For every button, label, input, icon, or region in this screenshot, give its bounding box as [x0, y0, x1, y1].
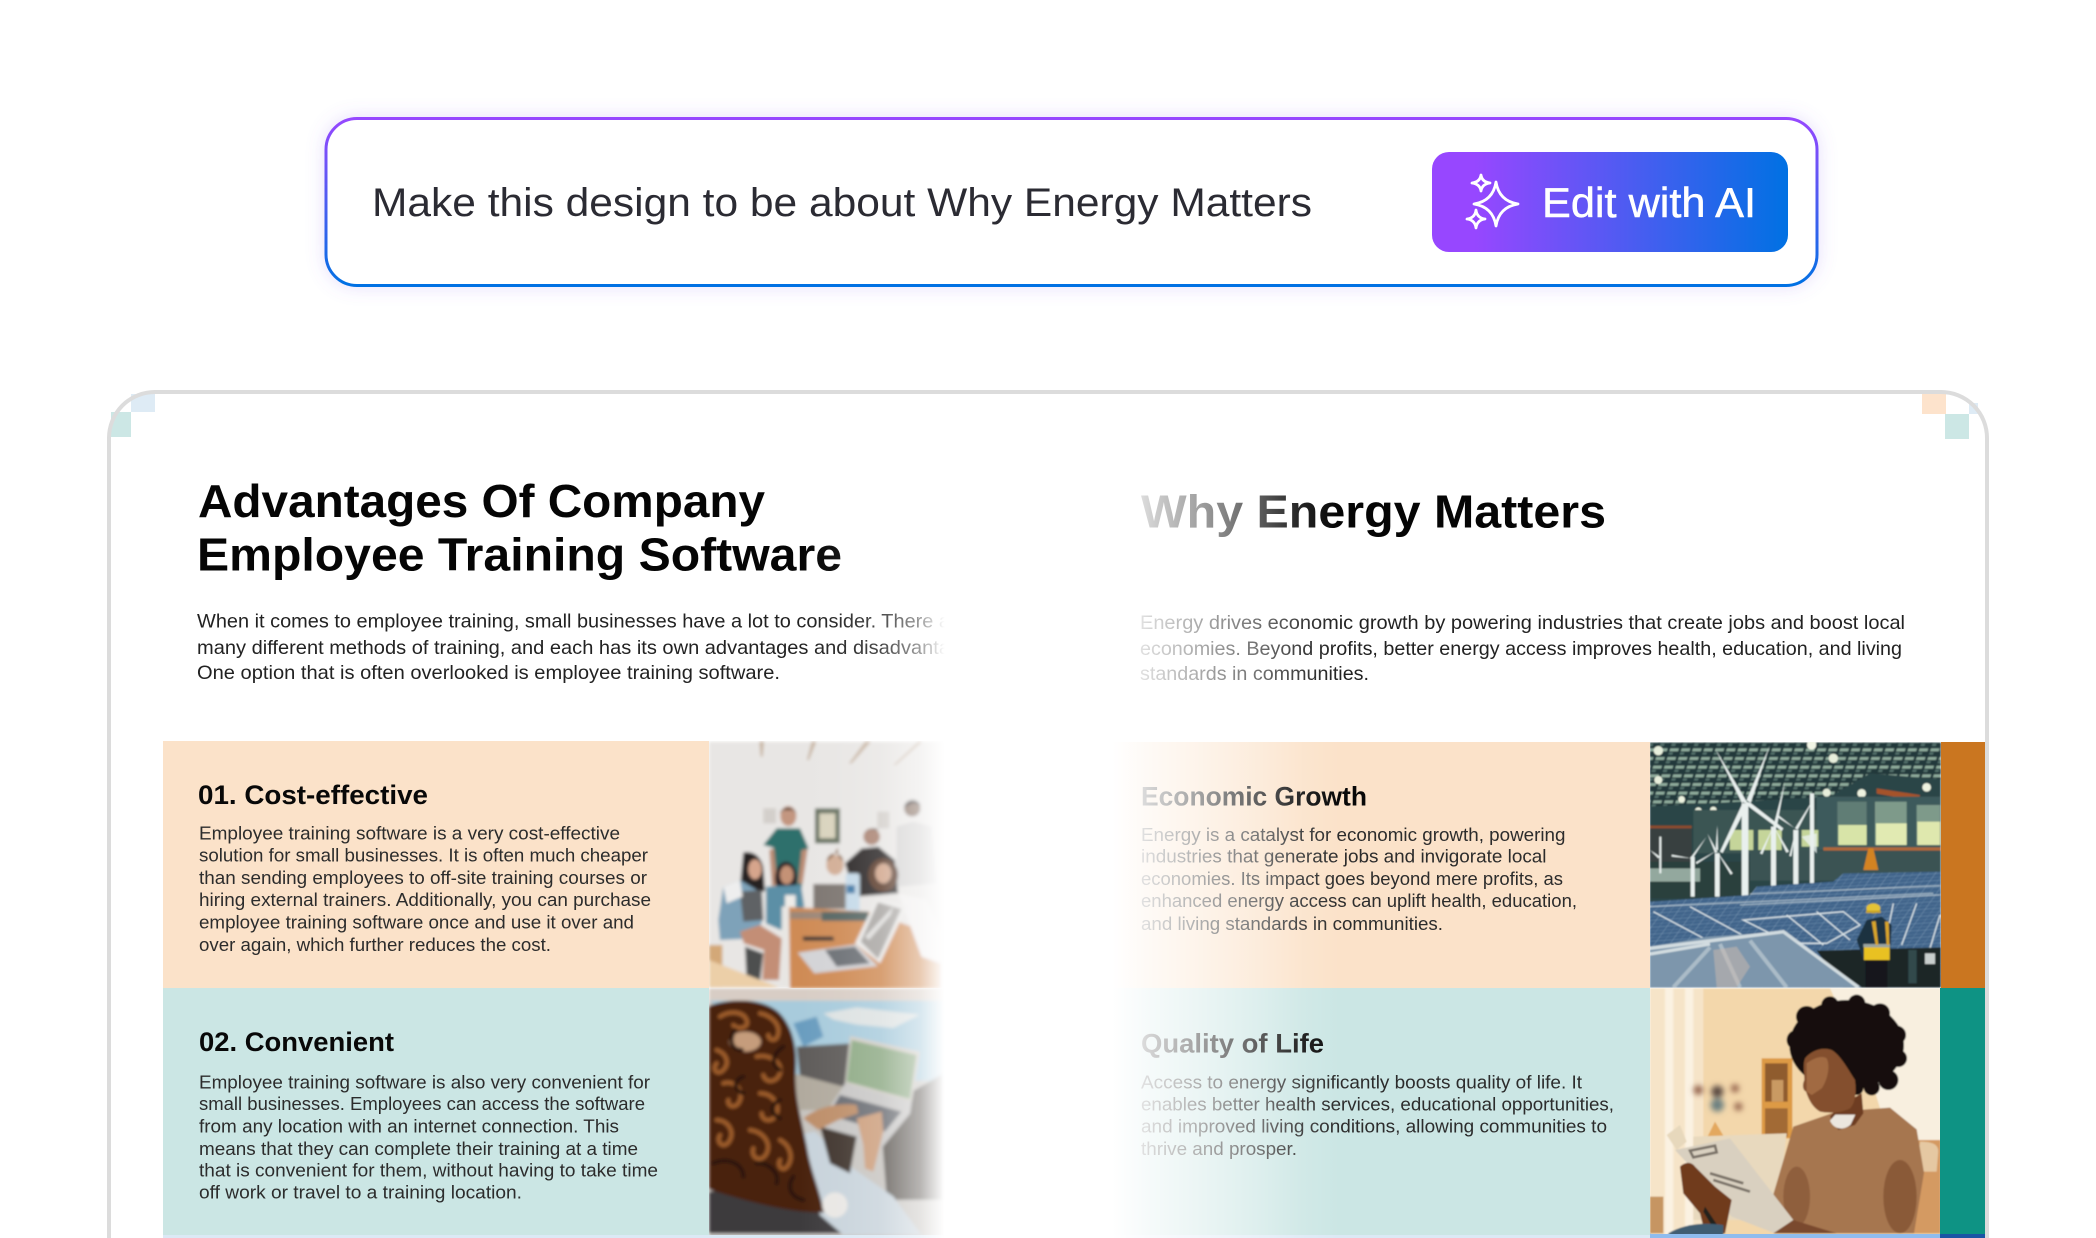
- card text: 02 convenient: means that they can complete their training at a time: [199, 1138, 638, 1159]
- card text: quality of life: [1141, 1028, 1614, 1159]
- card text: 02 convenient: small businesses. Employees can access the software: [199, 1093, 645, 1114]
- left slide title: Employee Training Software: [197, 528, 842, 580]
- card text: 02 convenient: from any location with an internet connection. This: [199, 1116, 619, 1136]
- left slide intro text: [197, 610, 950, 684]
- right slide intro text: economies. Beyond profits, better energy access improves health, education, and living: [1140, 638, 1902, 660]
- card text: 02 convenient: Employee training software is also very convenient for: [199, 1072, 650, 1092]
- prompt bar: [326, 118, 1817, 286]
- card text: 01 cost-effective: Employee training software is a very cost-effective: [199, 822, 620, 844]
- button: edit with AI: Edit with AI: [1542, 179, 1756, 226]
- right slide intro text: [1140, 612, 1905, 685]
- card text: economic growth: enhanced energy access can uplift health, education,: [1141, 890, 1577, 911]
- photo: wind turbines and solar panels in a factory: [1650, 740, 1941, 987]
- card text: quality of life: and improved living conditions, allowing communities to: [1141, 1116, 1607, 1136]
- card text: 01 cost-effective: than sending employees to off-site training courses or: [199, 867, 647, 888]
- left slide intro text: One option that is often overlooked is employee training software.: [197, 662, 780, 684]
- card text: 02 convenient: [199, 1027, 658, 1202]
- card text: 02 convenient: 02. Convenient: [199, 1027, 394, 1057]
- photo: team around a table: [709, 742, 946, 988]
- slide panel: [109, 392, 1987, 1238]
- decorative corner tiles: [111, 394, 1978, 439]
- card text: 01 cost-effective: solution for small businesses. It is often much cheaper: [199, 844, 648, 866]
- card text: 01 cost-effective: [198, 780, 651, 955]
- button: edit with AI: [1432, 152, 1788, 252]
- right card backgrounds: [1100, 742, 1985, 1238]
- card text: economic growth: and living standards in communities.: [1141, 913, 1443, 934]
- card text: 01 cost-effective: 01. Cost-effective: [198, 780, 428, 810]
- left card backgrounds: [163, 741, 945, 1238]
- panel border: [109, 392, 1987, 1238]
- card text: 02 convenient: that is convenient for them, without having to take time: [199, 1160, 658, 1180]
- card text: 02 convenient: off work or travel to a training location.: [199, 1182, 522, 1202]
- card text: economic growth: Energy is a catalyst for economic growth, powering: [1141, 824, 1566, 845]
- card text: economic growth: [1141, 782, 1577, 934]
- card text: economic growth: Economic Growth: [1141, 782, 1367, 812]
- left slide title: [197, 475, 842, 580]
- card text: economic growth: economies. Its impact goes beyond mere profits, as: [1141, 868, 1563, 889]
- card text: quality of life: thrive and prosper.: [1141, 1138, 1297, 1159]
- right slide intro text: standards in communities.: [1140, 663, 1369, 685]
- card text: quality of life: enables better health services, educational opportunities,: [1141, 1094, 1614, 1114]
- card text: economic growth: industries that generate jobs and invigorate local: [1141, 846, 1546, 866]
- left slide intro text: When it comes to employee training, small businesses have a lot to consider. There a: [197, 610, 950, 632]
- right slide intro text: Energy drives economic growth by powering industries that create jobs and boost local: [1140, 612, 1905, 634]
- card text: 01 cost-effective: over again, which further reduces the cost.: [199, 934, 551, 955]
- card text: 01 cost-effective: hiring external trainers. Additionally, you can purchase: [199, 889, 651, 910]
- photo: woman with curly hair typing on a laptop: [709, 988, 946, 1238]
- left slide title: Advantages Of Company: [198, 475, 765, 527]
- prompt text: Make this design to be about Why Energy Matters: [372, 181, 1312, 225]
- right slide title: Why Energy Matters: [1141, 486, 1606, 538]
- card text: 01 cost-effective: employee training software once and use it over and: [199, 912, 634, 932]
- icon: sparkles: [1467, 175, 1518, 228]
- card text: quality of life: Quality of Life: [1141, 1028, 1324, 1058]
- left slide intro text: many different methods of training, and each has its own advantages and disadvanta: [197, 637, 950, 659]
- photo: woman reading a book at home: [1650, 988, 1941, 1235]
- card text: quality of life: Access to energy significantly boosts quality of life. It: [1141, 1072, 1582, 1092]
